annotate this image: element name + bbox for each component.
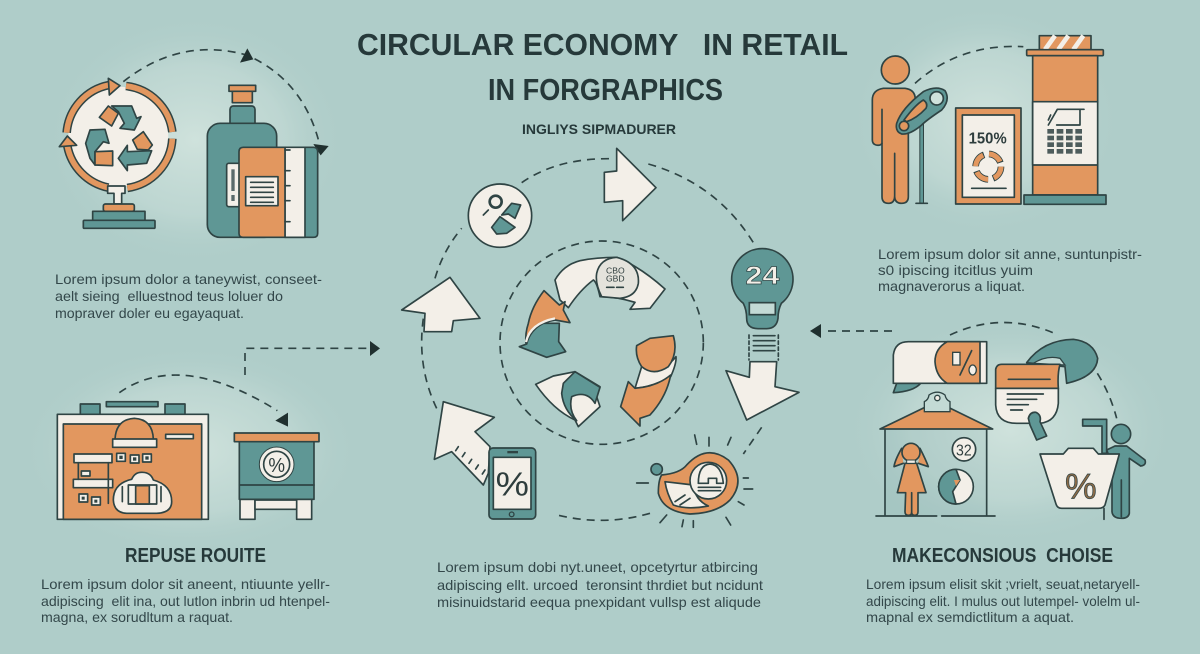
text block: center: Lorem ipsum dobi nyt.uneet, opcetyrtur atbircing — [437, 559, 758, 575]
text block: bottom right: mapnal ex semdictlitum a aquat. — [866, 609, 1074, 625]
text block: bottom left: Lorem ipsum dolor sit aneent, ntiuunte yellr- — [41, 576, 330, 592]
recycling fragments: GBD — [606, 274, 625, 283]
icon: house with girl: 32 — [956, 442, 972, 459]
icon: snail-shaped store badge — [637, 435, 753, 527]
text block: top left: Lorem ipsum dolor a taneywist, conseet- — [55, 271, 322, 287]
text block: bottom right — [866, 576, 1140, 625]
text block: top left — [55, 271, 322, 321]
arrow: lower right — [726, 362, 799, 420]
text block: bottom left: magna, ex sorudltum a raquat. — [41, 609, 233, 625]
icon: lightbulb 24: 24 — [745, 262, 779, 290]
icon: house with girl — [876, 392, 995, 516]
icon: globe badge — [468, 184, 532, 247]
title — [357, 27, 848, 107]
text block: top right: magnaverorus a liquat. — [878, 278, 1025, 294]
arrow: lower left — [434, 402, 494, 485]
icon: shopper with basket: % — [1065, 467, 1097, 506]
icon: phone with percent: % — [496, 466, 529, 503]
icon: store cabinet and discount box — [57, 375, 319, 519]
text block: top right: Lorem ipsum dolor sit anne, suntunpistr- — [878, 246, 1142, 262]
arrow: left flow into cycle — [245, 341, 380, 375]
title: IN FORGRAPHICS — [488, 72, 723, 107]
icon: lightbulb 24 — [732, 249, 793, 360]
icon: recycling globe — [59, 78, 172, 228]
poster: 150%: 150% — [969, 131, 1007, 148]
poster: 150% — [956, 108, 1021, 204]
heading: make conscious choice: MAKECONSIOUS CHOISE — [892, 545, 1113, 567]
text block: bottom right: Lorem ipsum elisit skit ;vrielt, seuat,netaryell- — [866, 576, 1140, 592]
icon: card with curl — [996, 339, 1098, 440]
arrow: left — [402, 277, 480, 332]
text block: top right — [878, 246, 1142, 294]
icon: phone with percent — [489, 448, 536, 519]
icon: discount box — [234, 433, 319, 519]
text block: bottom left: adipiscing elit ina, out lutlon inbrin ud htenpel- — [41, 593, 330, 609]
arrow: right flow into cycle — [810, 324, 892, 338]
subtitle: INGLIYS SIPMADURER — [522, 121, 676, 137]
text block: bottom left — [41, 576, 330, 625]
icon: conscious choice house, card and shopper — [876, 322, 1145, 519]
inner dashed ring — [500, 241, 703, 444]
icon: bottle and book — [207, 85, 318, 237]
icon: store cabinet — [57, 402, 208, 519]
text block: top left: aelt sieing elluestnod teus loluer do — [55, 288, 283, 304]
icon: discount box: % — [268, 454, 285, 477]
title: CIRCULAR ECONOMY IN RETAIL — [357, 27, 848, 62]
text block: top right: s0 ipiscing itcitlus yuim — [878, 262, 1033, 278]
text block: center — [437, 559, 763, 610]
text block: top left: mopraver doler eu egayaquat. — [55, 305, 244, 321]
recycling fragments — [519, 257, 676, 427]
column with ticket and keypad — [1024, 36, 1106, 204]
icon: recycling globe and bottle — [59, 48, 329, 237]
banner with percent — [893, 342, 987, 393]
recycling fragments: CBO — [606, 266, 625, 275]
heading: repuse rouite: REPUSE ROUITE — [125, 545, 266, 567]
icon: shopper with basket — [1040, 419, 1145, 519]
central circular diagram — [402, 148, 799, 527]
text block: center: adipiscing ellt. urcoed teronsint thrdiet but ncidunt — [437, 577, 763, 593]
icon: shopper with poster and column — [872, 36, 1106, 204]
outer dashed ring — [422, 159, 762, 520]
text block: center: misinuidstarid eequa pnexpidant vullsp est aliqude — [437, 594, 761, 610]
icon: shopper — [872, 56, 947, 203]
text block: bottom right: adipiscing elit. I mulus out lutempel- volelm ul- — [866, 593, 1140, 609]
arrow: top — [604, 148, 656, 221]
